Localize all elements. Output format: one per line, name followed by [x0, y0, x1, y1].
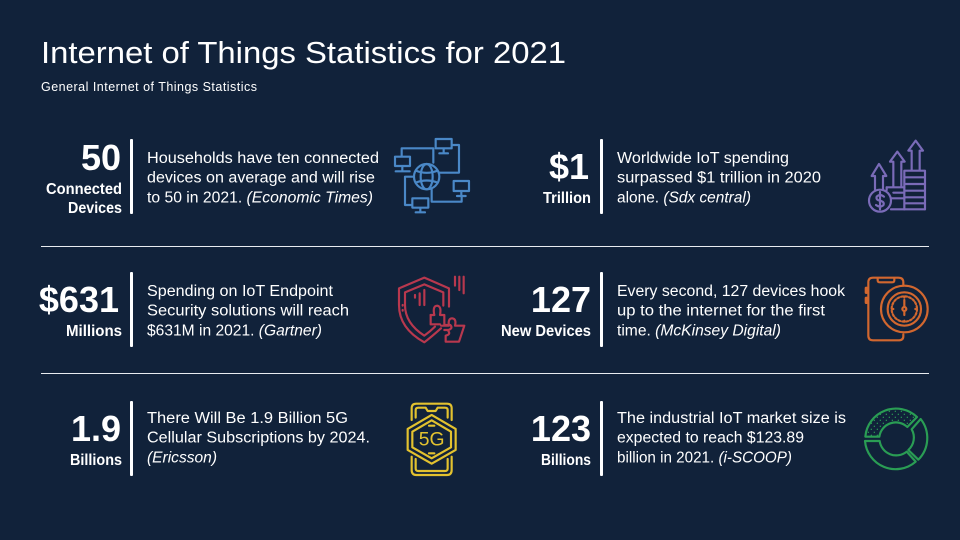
- panel: $631 millions: [39, 272, 464, 347]
- stat label: connected devices: Connected: [46, 181, 122, 198]
- icon: donut chart: [865, 409, 927, 469]
- text: worldwide spending: surpassed $1 trillion in 2020: [617, 170, 821, 186]
- stat: $631: $631: [39, 279, 119, 320]
- stat: 50: 50: [81, 137, 121, 178]
- text: 5G subscriptions: (Ericsson): [147, 450, 217, 466]
- text: every second: up to the internet for the first: [617, 302, 826, 320]
- icon: phone with gauge: [866, 278, 928, 340]
- icon: rising coins: [869, 141, 925, 212]
- panel: 50 connected devices: [46, 137, 469, 217]
- icon: globe network: [395, 139, 469, 212]
- stat label: billions: Billions: [541, 452, 591, 469]
- text: worldwide spending: [617, 150, 821, 206]
- panel: 123 billions: [531, 401, 927, 476]
- stat label: millions: Millions: [66, 323, 122, 340]
- text: 5G subscriptions: Cellular Subscriptions by 2024.: [147, 430, 370, 446]
- text: households: Households have ten connected: [147, 150, 379, 167]
- panel: 127 new devices: [501, 272, 928, 347]
- text: endpoint security: Security solutions will reach: [147, 302, 349, 320]
- text: industrial market: expected to reach $123.89: [617, 430, 804, 446]
- panel: $1 trillion: [543, 139, 925, 214]
- text: 5G subscriptions: [147, 410, 370, 466]
- icon: shield with puzzle: [399, 277, 464, 342]
- stat label: connected devices: Devices: [68, 200, 122, 217]
- text: every second: [617, 283, 845, 340]
- panel: 1.9 billions: [70, 401, 456, 476]
- text: endpoint security: Spending on IoT Endpoint: [147, 283, 334, 300]
- text: households: to 50 in 2021. (Economic Times): [147, 190, 373, 206]
- stat: 127: 127: [531, 279, 591, 320]
- text: every second: time. (McKinsey Digital): [617, 322, 781, 340]
- title: Internet of Things Statistics for 2021: [41, 36, 566, 70]
- text: every second: Every second, 127 devices hook: [617, 283, 845, 300]
- text: 5G subscriptions: There Will Be 1.9 Billion 5G: [147, 410, 348, 427]
- text: worldwide spending: alone. (Sdx central): [617, 190, 751, 206]
- text: households: [147, 150, 379, 206]
- text: industrial market: [617, 410, 846, 466]
- stat: $1: $1: [549, 146, 589, 187]
- text: households: devices on average and will rise: [147, 170, 375, 186]
- icon: 5G phone: 5G: [419, 430, 445, 451]
- text: endpoint security: [147, 283, 349, 340]
- stat: 123: 123: [531, 408, 591, 449]
- subtitle: General Internet of Things Statistics: [41, 80, 257, 94]
- stat: 1.9: 1.9: [71, 408, 121, 449]
- text: industrial market: billion in 2021. (i-SCOOP): [617, 450, 792, 466]
- stat label: new devices: New Devices: [501, 323, 591, 340]
- text: worldwide spending: Worldwide IoT spending: [617, 150, 789, 167]
- stat label: trillion: Trillion: [543, 190, 591, 207]
- icon: 5G phone: [408, 404, 456, 475]
- text: endpoint security: $631M in 2021. (Gartner): [147, 322, 322, 340]
- stat label: billions: Billions: [70, 452, 122, 469]
- text: industrial market: The industrial IoT market size is: [617, 410, 846, 427]
- stat label: connected devices: [46, 181, 122, 217]
